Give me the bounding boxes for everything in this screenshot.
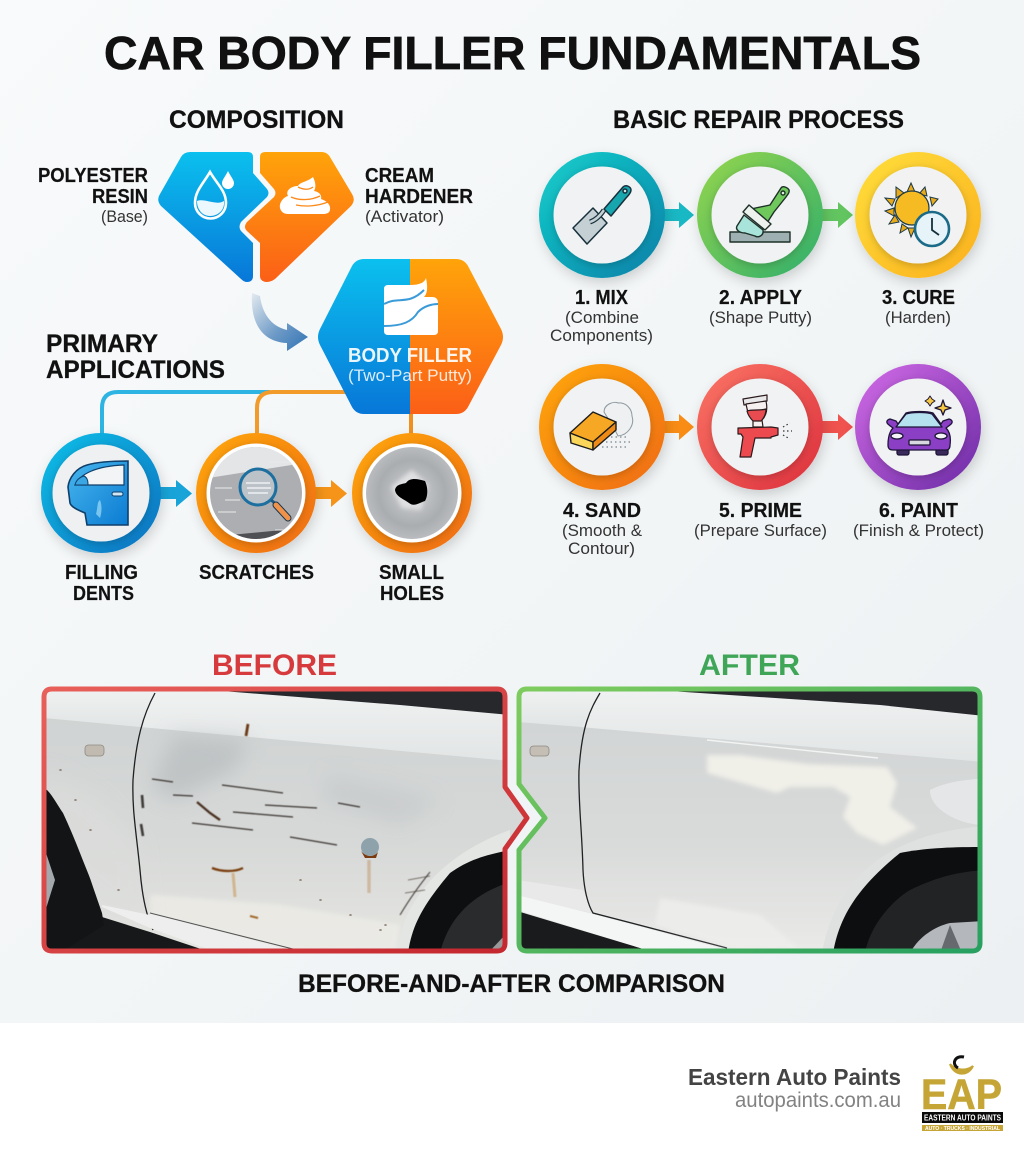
dent shading xyxy=(150,735,248,800)
application: filling dents xyxy=(41,433,161,553)
label: cream hardener: CREAM xyxy=(365,165,434,187)
label: step 6: (Finish & Protect) xyxy=(853,521,984,540)
footer background xyxy=(0,1023,1024,1154)
window trim xyxy=(228,692,502,714)
ground and sill xyxy=(67,917,200,948)
icon: hole xyxy=(395,479,427,505)
window trim xyxy=(678,692,978,716)
heading: composition: COMPOSITION xyxy=(169,106,344,134)
label: step 2: (Shape Putty) xyxy=(709,308,812,327)
application: small holes xyxy=(352,433,472,553)
label: step 5: (Prepare Surface) xyxy=(694,521,827,540)
label: step 3: 3. CURE xyxy=(882,287,955,309)
door seam xyxy=(579,693,727,948)
step 1: mix xyxy=(539,152,665,278)
icon: cream dollop xyxy=(280,177,330,214)
icon: sanding block xyxy=(570,402,633,450)
icon: sun and clock xyxy=(885,183,949,246)
label: step 4: Contour) xyxy=(568,539,635,558)
light upper bands xyxy=(44,689,155,727)
label: small holes xyxy=(379,562,444,605)
step 2: apply xyxy=(697,152,823,278)
label: step 4: 4. SAND xyxy=(563,500,641,522)
connector lines xyxy=(102,392,411,436)
icon: brush applying putty xyxy=(730,187,790,242)
icon: spray gun xyxy=(738,395,778,457)
hardener puzzle piece xyxy=(245,152,354,282)
label: step 1: 1. MIX xyxy=(575,287,629,309)
label: step 3 xyxy=(882,287,955,327)
arrow: apply to cure xyxy=(820,202,853,228)
side marker xyxy=(85,745,104,756)
lower fender band xyxy=(522,881,582,892)
character line xyxy=(707,740,878,758)
icon: trowel xyxy=(573,186,631,244)
label: scratches: SCRATCHES xyxy=(199,562,314,584)
label: step 1: Components) xyxy=(550,326,653,345)
label: small holes: SMALL xyxy=(379,562,444,584)
body filler text: BODY FILLER xyxy=(348,345,473,367)
lower door light area xyxy=(152,896,396,938)
arrow: sand to prime xyxy=(661,414,694,440)
right wheel arch xyxy=(408,852,502,948)
side marker xyxy=(530,746,549,756)
logo: EAP: EAP xyxy=(921,1071,1002,1119)
upper door band xyxy=(580,689,985,762)
reflection xyxy=(707,755,917,845)
label: step 6 xyxy=(853,500,984,540)
label: step 6: 6. PAINT xyxy=(879,500,958,522)
icon: water drops xyxy=(195,171,234,218)
before frame xyxy=(44,689,527,951)
rust spot xyxy=(361,838,379,858)
label: step 4 xyxy=(562,500,643,558)
scratches and rust xyxy=(141,724,430,918)
hexagon: body filler xyxy=(318,259,503,414)
label: cream hardener: (Activator) xyxy=(365,207,444,226)
left wheel xyxy=(46,790,103,918)
label: filling dents: DENTS xyxy=(73,583,134,605)
heading: primary applications: PRIMARY xyxy=(46,330,158,358)
heading: before: BEFORE xyxy=(212,649,337,682)
ground and sill xyxy=(522,912,642,948)
resin puzzle piece xyxy=(158,152,268,282)
footer brand text: autopaints.com.au xyxy=(735,1089,901,1112)
panel: before photo xyxy=(42,687,532,953)
heading: basic repair process: BASIC REPAIR PROCESS xyxy=(613,106,904,134)
label: cream hardener xyxy=(365,165,474,226)
logo: EAP: AUTO · TRUCKS · INDUSTRIAL xyxy=(925,1126,1000,1132)
label: step 2: 2. APPLY xyxy=(719,287,803,309)
label: step 3: (Harden) xyxy=(885,308,951,327)
label: filling dents: FILLING xyxy=(65,562,138,584)
label: step 1 xyxy=(550,287,653,345)
curved arrow xyxy=(252,293,308,351)
icon: magnifying glass xyxy=(240,469,288,518)
door seam xyxy=(133,693,155,930)
footer brand text xyxy=(688,1064,901,1112)
label: step 5 xyxy=(694,500,827,540)
footer brand text: Eastern Auto Paints xyxy=(688,1064,901,1090)
icon: purple car with sparkles xyxy=(887,396,952,455)
title: CAR BODY FILLER FUNDAMENTALS xyxy=(104,27,921,79)
label: step 4: (Smooth & xyxy=(562,521,643,540)
label: polyester resin xyxy=(38,165,149,226)
label: polyester resin: POLYESTER xyxy=(38,165,149,187)
step 6: paint xyxy=(855,364,981,490)
heading: primary applications: APPLICATIONS xyxy=(46,356,225,384)
label: step 2 xyxy=(709,287,812,327)
panel: after photo xyxy=(517,687,987,953)
label: filling dents xyxy=(65,562,138,605)
fender and wheel xyxy=(823,935,836,948)
arrow: scratches to holes xyxy=(313,480,347,507)
heading: primary applications xyxy=(46,330,225,384)
step 5: prime xyxy=(697,364,823,490)
step 3: cure xyxy=(855,152,981,278)
icon: car door xyxy=(68,461,128,525)
icon: filler layers xyxy=(384,278,438,335)
hexagon: body filler: (Two-Part Putty) xyxy=(348,366,472,385)
caption: before-and-after comparison: BEFORE-AND-AFTER COMPARISON xyxy=(298,970,725,998)
application: scratches xyxy=(196,433,316,553)
label: cream hardener: HARDENER xyxy=(365,186,474,208)
label: small holes: HOLES xyxy=(380,583,444,605)
arrow: mix to apply xyxy=(661,202,694,228)
arrow: prime to paint xyxy=(820,414,853,440)
arrow: dents to scratches xyxy=(158,480,192,507)
label: step 1: (Combine xyxy=(565,308,639,327)
label: step 5: 5. PRIME xyxy=(719,500,802,522)
logo: EAP: EASTERN AUTO PAINTS xyxy=(924,1114,1002,1122)
label: polyester resin: RESIN xyxy=(92,186,148,208)
logo: EAP xyxy=(921,1057,1003,1132)
dirt specks xyxy=(60,770,386,930)
label: polyester resin: (Base) xyxy=(101,207,148,226)
fender band above wheel xyxy=(425,830,510,888)
step 4: sand xyxy=(539,364,665,490)
heading: after: AFTER xyxy=(699,649,800,682)
after frame xyxy=(519,689,980,951)
